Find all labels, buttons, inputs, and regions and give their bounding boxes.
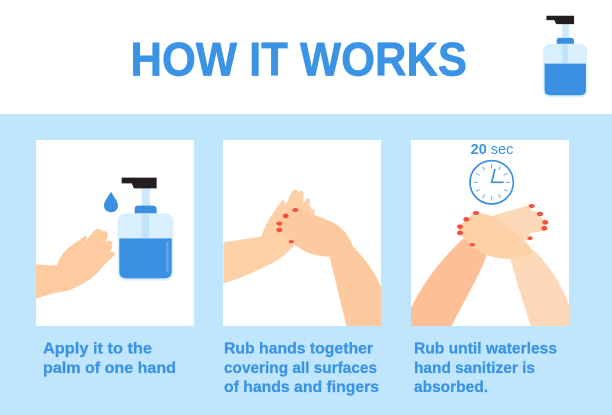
timer label: 20 sec bbox=[471, 142, 513, 158]
illustration: bottle, drop and hand bbox=[36, 178, 173, 299]
panel 3 caption: hand sanitizer is bbox=[414, 360, 535, 377]
illustration: rubbing hands bbox=[223, 189, 381, 326]
panel 2 caption bbox=[224, 340, 379, 396]
panel 3 caption bbox=[414, 340, 557, 396]
panel: rub until absorbed bbox=[411, 140, 569, 396]
panel 3 card bbox=[411, 140, 569, 326]
icon: sanitizer bottle bbox=[118, 178, 173, 281]
panel 2 caption: covering all surfaces bbox=[224, 360, 377, 377]
arm right bbox=[505, 245, 569, 326]
panel 2 card bbox=[223, 140, 381, 326]
icon: clock bbox=[470, 161, 513, 204]
nails bbox=[457, 204, 548, 246]
back hand and arm bbox=[223, 189, 315, 283]
illustration: timer and crossed hands bbox=[411, 161, 569, 326]
panel: apply to palm bbox=[36, 140, 194, 377]
panel 1 caption: palm of one hand bbox=[43, 360, 176, 377]
panel 2 caption: Rub hands together bbox=[224, 340, 373, 358]
panel 1 caption bbox=[43, 340, 176, 377]
nails bbox=[276, 208, 298, 243]
front hand and arm bbox=[278, 209, 381, 326]
panel 1 card bbox=[36, 140, 194, 326]
icon: drop bbox=[104, 192, 118, 212]
icon: header sanitizer bottle bbox=[543, 16, 587, 97]
hand left bbox=[458, 212, 533, 259]
panel: rub hands together bbox=[223, 140, 381, 396]
panel 3 caption: absorbed. bbox=[414, 379, 488, 396]
arm left bbox=[411, 238, 487, 326]
background band bbox=[0, 114, 612, 415]
panel 2 caption: of hands and fingers bbox=[224, 379, 379, 396]
title: HOW IT WORKS bbox=[130, 34, 467, 87]
panel 1 caption: Apply it to the bbox=[43, 340, 152, 358]
icon: hand bbox=[36, 229, 115, 299]
hand right bbox=[492, 205, 547, 252]
panel 3 caption: Rub until waterless bbox=[414, 340, 557, 358]
